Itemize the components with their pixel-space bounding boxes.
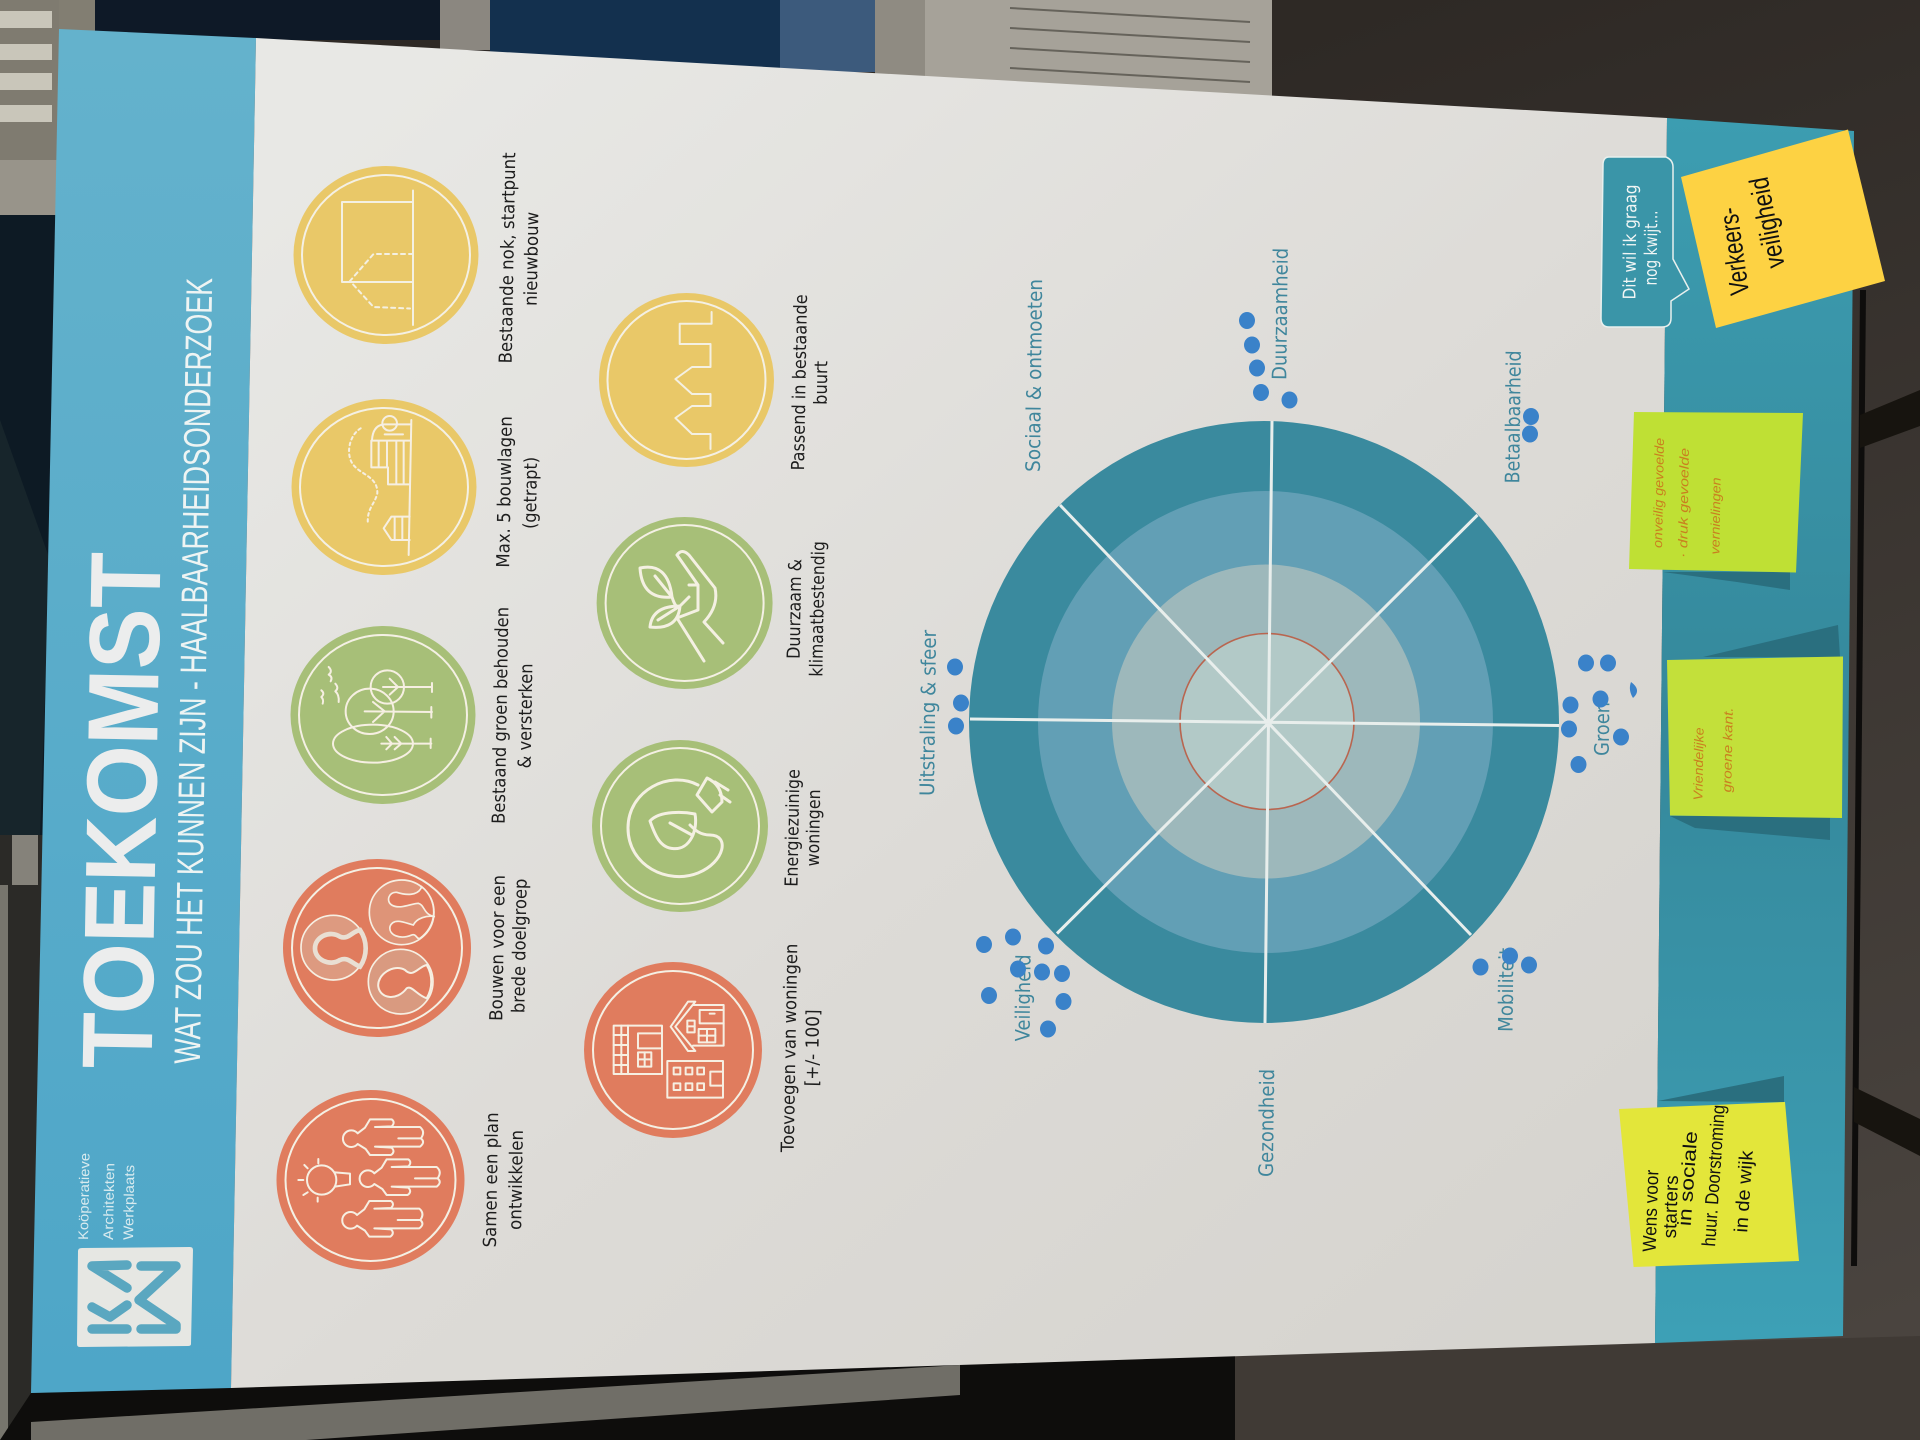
icon: three diverse busts [283, 859, 471, 1037]
icon: leaf with plug [592, 740, 768, 912]
logo text: company name: Koöperatieve [75, 1153, 93, 1240]
label: passend in bestaande buurt: Passend in bestaande [788, 294, 812, 471]
icon: trees and birds [290, 626, 476, 804]
sticky note: vriendelijke groene kant: Vriendelijke [1690, 727, 1707, 801]
chart labels: Uitstraling & sfeer [915, 629, 941, 796]
icon: street profile [599, 293, 774, 467]
label: bestaand groen behouden en versterken [489, 607, 537, 824]
sticky note: wens voor starters: Wens voor [1640, 1169, 1663, 1252]
item: toevoegen van woningen [584, 943, 824, 1153]
label: duurzaam en klimaatbestendig: klimaatbestendig [806, 541, 830, 677]
chart labels: Gezondheid [1254, 1069, 1279, 1177]
label: bouwen voor een brede doelgroep [486, 875, 532, 1021]
icon: people with lightbulb [276, 1090, 464, 1270]
icon: stepped building [292, 399, 476, 575]
chart labels: Mobiliteit [1493, 948, 1519, 1032]
sticky note: vriendelijke groene kant: groene kant. [1719, 707, 1736, 793]
sticky note: wens voor starters: in sociale [1675, 1130, 1702, 1227]
chart labels: Betaalbaarheid [1500, 350, 1526, 484]
subtitle: WAT ZOU HET KUNNEN ZIJN - HAALBAARHEIDSONDERZOEK [167, 277, 220, 1064]
voting dots [947, 312, 1637, 1038]
icon: hand holding a plant [597, 517, 773, 689]
label: bouwen voor een brede doelgroep: brede doelgroep [508, 878, 532, 1013]
callout: speech bubble [1601, 157, 1689, 327]
label: passend in bestaande buurt [788, 294, 832, 471]
label: bestaande nok startpunt nieuwbouw: nieuwbouw [521, 212, 543, 306]
sticky note: wens voor starters: starters [1660, 1175, 1683, 1239]
item: passend in bestaande buurt [599, 293, 832, 471]
label: samen een plan ontwikkelen [480, 1112, 528, 1248]
panel: blue header band [31, 29, 256, 1393]
label: energiezuinige woningen: Energiezuinige [781, 769, 805, 887]
sticky note: onveilig gevoelde: vernielingen [1707, 477, 1724, 555]
logo text: company name: Architekten [100, 1163, 117, 1240]
label: toevoegen van woningen [778, 943, 824, 1153]
item: bestaande nok [294, 152, 543, 364]
sticky note: onveilig gevoelde: onveilig gevoelde [1650, 438, 1667, 548]
item: samen een plan ontwikkelen [276, 1090, 528, 1270]
item: max 5 bouwlagen [292, 399, 542, 575]
item: energiezuinige woningen [592, 740, 825, 912]
icon: existing roof outline [294, 166, 478, 344]
title: TOEKOMST [62, 551, 182, 1069]
item: bestaand groen behouden [290, 607, 537, 824]
label: bouwen voor een brede doelgroep: Bouwen voor een [486, 875, 510, 1021]
label: max 5 bouwlagen getrapt: (getrapt) [520, 457, 542, 529]
label: energiezuinige woningen: woningen [803, 789, 825, 867]
callout: speech bubble: nog kwijt... [1642, 210, 1662, 286]
label: duurzaam en klimaatbestendig: Duurzaam & [784, 559, 806, 659]
label: bestaande nok startpunt nieuwbouw [496, 152, 543, 364]
item: duurzaam en klimaatbestendig [597, 517, 830, 689]
sticky note: verkeersveiligheid [1681, 130, 1885, 328]
label: samen een plan ontwikkelen: Samen een plan [480, 1112, 503, 1248]
label: max 5 bouwlagen getrapt: Max. 5 bouwlagen [493, 416, 517, 568]
sticky note: wens voor starters [1619, 1076, 1799, 1267]
label: toevoegen van woningen: Toevoegen van woningen [778, 943, 802, 1153]
panel: teal notes band [1655, 118, 1854, 1343]
item: bouwen voor een brede doelgroep [283, 859, 532, 1037]
label: duurzaam en klimaatbestendig [784, 541, 830, 677]
sticky note: onveilig gevoelde: · druk gevoelde [1675, 448, 1692, 558]
label: samen een plan ontwikkelen: ontwikkelen [505, 1130, 528, 1230]
label: bestaand groen behouden en versterken: & versterken [515, 663, 537, 769]
sticky note: verkeersveiligheid: veiligheid [1744, 175, 1791, 271]
label: max 5 bouwlagen getrapt [493, 416, 542, 568]
logo text: company name [75, 1153, 137, 1240]
chart labels: Sociaal & ontmoeten [1021, 279, 1047, 472]
label: toevoegen van woningen: [+/- 100] [802, 1009, 824, 1087]
sticky note: vriendelijke groene kant [1667, 625, 1843, 840]
callout: speech bubble: Dit wil ik graag [1620, 184, 1642, 300]
chart labels: Duurzaamheid [1267, 248, 1293, 380]
label: passend in bestaande buurt: buurt [811, 361, 832, 405]
logo: KAW mark [77, 1247, 193, 1347]
panel: white main area [231, 38, 1667, 1388]
icon: three houses [584, 962, 762, 1138]
chart labels: Veiligheid [1010, 954, 1036, 1042]
label: bestaand groen behouden en versterken: Bestaand groen behouden [489, 607, 513, 824]
sticky note: onveilig gevoelde [1629, 412, 1803, 590]
sticky note: verkeersveiligheid: Verkeers- [1713, 206, 1755, 297]
chart: radial wheel [969, 421, 1559, 1023]
label: energiezuinige woningen [781, 769, 825, 887]
sticky note: wens voor starters: in de wijk [1731, 1149, 1758, 1233]
label: bestaande nok startpunt nieuwbouw: Bestaande nok, startpunt [496, 152, 520, 364]
sticky note: wens voor starters: huur. Doorstroming [1699, 1104, 1730, 1247]
chart labels [915, 248, 1614, 1177]
chart labels: Groen [1590, 702, 1614, 756]
logo text: company name: Werkplaats [120, 1165, 137, 1240]
